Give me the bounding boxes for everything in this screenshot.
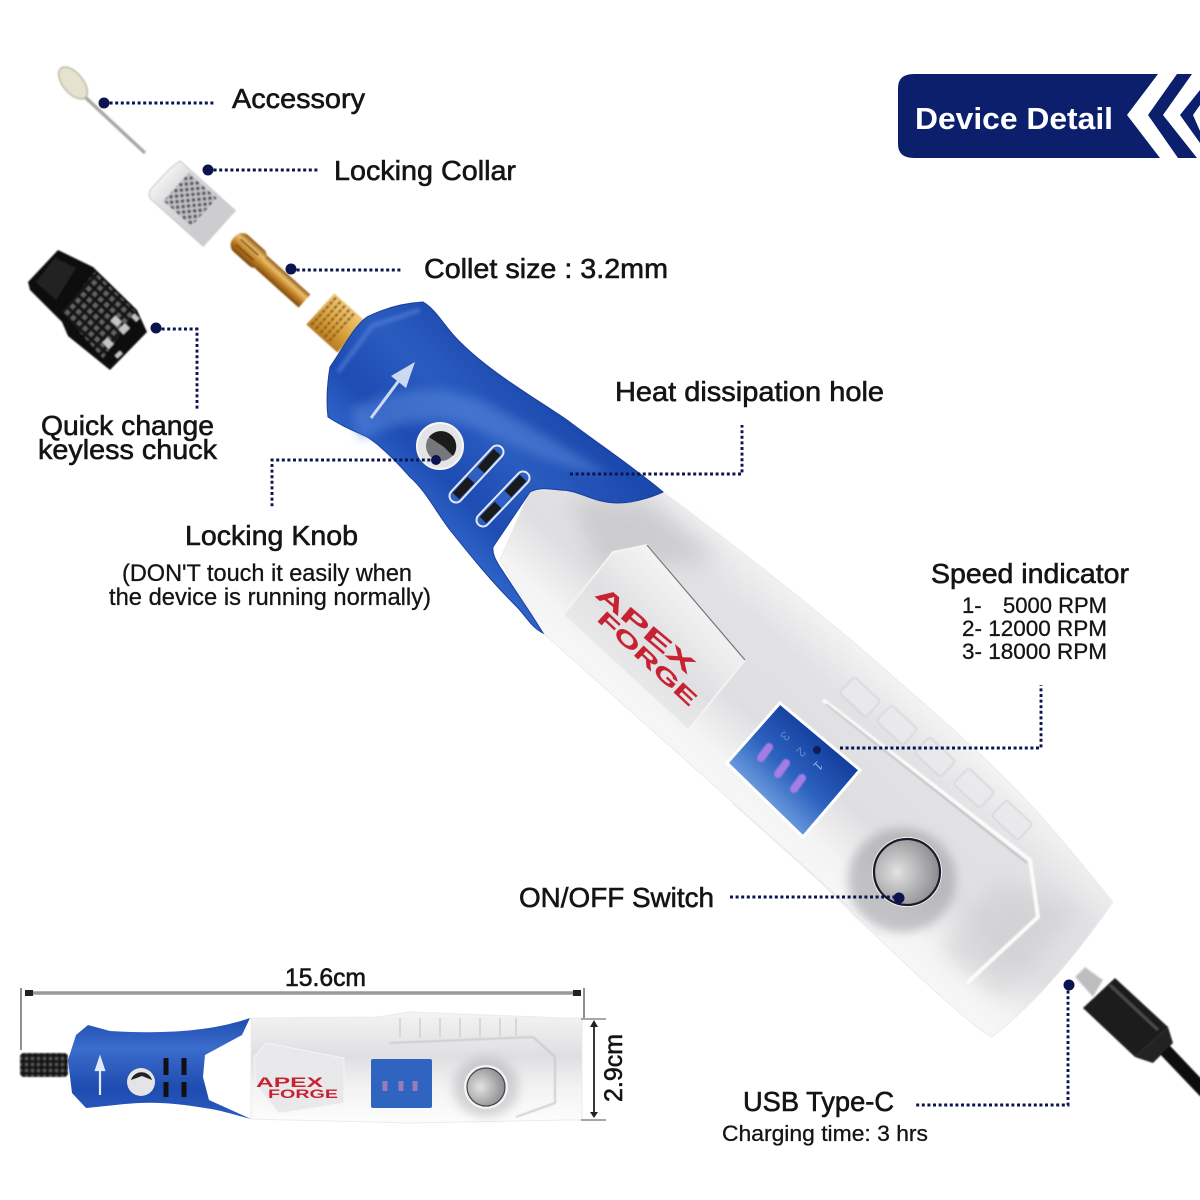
label: Locking Knob: Locking Knob	[185, 520, 358, 551]
label: ON/OFF Switch	[519, 882, 904, 913]
leader: collet	[291, 269, 403, 271]
lower edge line	[733, 803, 880, 935]
logo: APEX FORGE: APEX	[591, 581, 701, 679]
label: Locking Knob: the device is running normally)	[109, 584, 431, 611]
body shading tail	[940, 880, 1080, 1000]
label: USB Type-C	[722, 980, 1074, 1146]
indicator numbers: 2	[793, 744, 809, 760]
grip ridges	[839, 677, 1033, 840]
banner: Device Detail	[898, 74, 1200, 158]
ON/OFF switch	[848, 828, 956, 932]
label: Accessory: Accessory	[232, 83, 365, 114]
banner chevron 1	[1148, 74, 1197, 158]
label: Quick change keyless chuck	[38, 322, 218, 465]
label: Collet size	[286, 253, 668, 284]
small locking knob	[127, 1068, 155, 1096]
head highlight band	[350, 390, 610, 475]
body shading near head	[570, 500, 720, 570]
label: Speed indicator: 5000 RPM	[1003, 593, 1107, 618]
label: Accessory	[98, 83, 365, 114]
label: Locking Collar: Locking Collar	[334, 155, 516, 186]
height dimension	[581, 1019, 628, 1120]
blue head	[327, 302, 663, 633]
label: ON/OFF Switch: ON/OFF Switch	[519, 882, 714, 913]
banner chevron 2	[1180, 90, 1200, 143]
indicator numbers: 1	[810, 758, 826, 774]
leader: chuck	[156, 329, 197, 411]
small logo	[256, 1074, 338, 1101]
leader: locking collar	[208, 169, 320, 171]
label: Speed indicator: 2- 12000 RPM	[962, 616, 1107, 641]
tool body shell	[500, 490, 1113, 1037]
indicator numbers: 3	[777, 728, 793, 744]
part: locking collar	[146, 159, 235, 246]
leader: accessory	[104, 102, 216, 104]
leader: usb	[915, 985, 1068, 1105]
label: USB Type-C: Charging time: 3 hrs	[722, 1121, 928, 1146]
height dimension: 2.9cm	[600, 1034, 628, 1102]
heat vent slots	[456, 452, 523, 520]
part: brass threaded spindle	[306, 293, 366, 353]
logo panel dark edge	[647, 545, 745, 660]
small logo panel	[254, 1043, 344, 1113]
small logo: APEX	[256, 1074, 324, 1090]
head edge highlight	[338, 310, 420, 372]
small grip	[400, 1018, 516, 1038]
small screen	[371, 1059, 432, 1108]
part: quick change keyless chuck	[28, 250, 147, 370]
label: Speed indicator: 1-	[962, 593, 982, 618]
label: USB Type-C: USB Type-C	[743, 1086, 894, 1117]
banner title: Device Detail	[915, 101, 1113, 136]
label: Quick change keyless chuck: Quick change	[41, 410, 214, 441]
main tool: rotary device	[327, 302, 1113, 1037]
small switch	[453, 1057, 519, 1117]
logo: APEX FORGE	[591, 581, 701, 711]
label: Locking Knob: (DON'T touch it easily when	[122, 560, 412, 587]
width dimension	[21, 964, 584, 1050]
small device with dimensions	[20, 964, 628, 1123]
label: Collet size: Collet size : 3.2mm	[424, 253, 668, 284]
width dimension: 15.6cm	[285, 964, 366, 992]
leader: heat	[570, 425, 742, 474]
leader: locking knob	[272, 460, 436, 507]
leader: switch	[730, 896, 898, 898]
label: Heat dissipation hole: Heat dissipation hole	[615, 376, 884, 407]
small panel line	[389, 1037, 555, 1117]
leader: speed	[840, 685, 1041, 748]
label: Speed indicator: Speed indicator	[931, 558, 1129, 589]
part: brass collet	[227, 229, 312, 309]
logo: APEX FORGE: FORGE	[593, 608, 701, 711]
label: Locking Knob	[109, 455, 441, 611]
speed indicator screen	[727, 703, 860, 837]
logo panel	[563, 545, 745, 730]
small logo: FORGE	[268, 1087, 338, 1101]
USB Type-C cable	[1075, 967, 1200, 1092]
small body	[251, 1012, 582, 1123]
part: accessory felt bit	[53, 62, 145, 153]
small vents	[166, 1058, 184, 1097]
label: Speed indicator: 3- 18000 RPM	[962, 639, 1107, 664]
small blue head	[68, 1018, 251, 1119]
raised panel line	[823, 700, 1038, 983]
label: Locking Collar	[202, 155, 516, 186]
indicator numbers	[777, 728, 826, 774]
small chuck	[20, 1053, 68, 1077]
small arrow	[96, 1058, 104, 1095]
label: Quick change keyless chuck: keyless chuck	[38, 434, 218, 465]
locking knob	[417, 423, 463, 469]
label: Speed indicator	[840, 558, 1129, 748]
label: Heat dissipation hole	[570, 376, 884, 474]
indicator lights	[761, 747, 802, 789]
direction arrow on head	[371, 362, 415, 418]
